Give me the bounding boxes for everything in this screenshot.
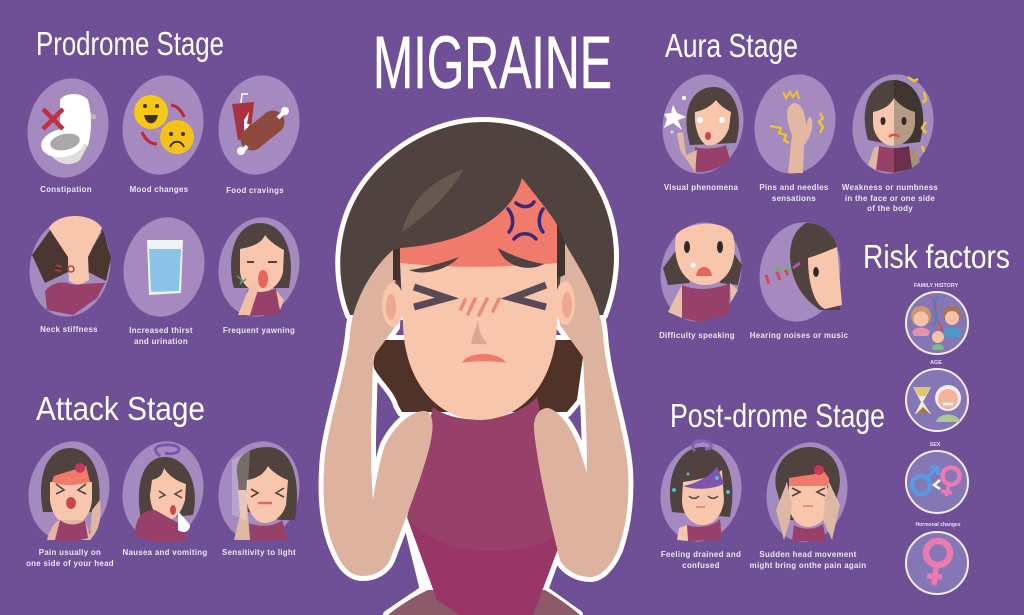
panel: post-drome stage [651, 397, 885, 570]
symptom: pins and needles [745, 67, 845, 203]
nose [471, 321, 487, 344]
symptom: neck stiffness [20, 210, 120, 334]
symptom: difficulty speaking: Difficulty speaking [659, 331, 735, 340]
blush [461, 299, 499, 315]
panel: aura stage [651, 27, 943, 340]
white sticker outline [323, 122, 628, 615]
symptom: hearing noises or music [750, 215, 850, 340]
symptom: weakness or numbness: in the face or one side [845, 194, 935, 203]
right arm [534, 243, 628, 577]
symptom: difficulty speaking [651, 215, 751, 340]
title: MIGRAINE [373, 21, 612, 104]
symptom: sudden head movement: Sudden head movement [759, 550, 857, 559]
red forehead [400, 178, 557, 267]
symptom: food cravings: Food cravings [226, 186, 284, 195]
symptom: constipation: Constipation [40, 185, 92, 194]
symptom: visual phenomena [653, 67, 753, 192]
lower hair [373, 340, 583, 412]
symptom: pins and needles: sensations [772, 194, 816, 203]
symptom: frequent yawning: Frequent yawning [223, 326, 295, 335]
face [400, 262, 557, 420]
symptom: frequent yawning [209, 210, 309, 335]
anger mark [508, 202, 543, 239]
heading: aura stage: Aura Stage [665, 27, 798, 64]
risk: age [906, 360, 968, 431]
symptom: sudden head movement [750, 435, 866, 570]
symptom: weakness or numbness [842, 67, 943, 213]
symptom: pins and needles: Pins and needles [759, 183, 829, 192]
ears [382, 283, 404, 327]
symptom: feeling drained and confused [651, 435, 751, 570]
risk: sex [906, 442, 968, 513]
left arm [323, 250, 433, 576]
closed eyes [414, 287, 447, 307]
symptom: feeling drained and confused: Feeling drained and [661, 550, 741, 559]
risk: age: AGE [930, 360, 942, 366]
hair [340, 122, 614, 315]
eyebrows [409, 257, 459, 272]
side bangs [393, 248, 400, 280]
symptom: mood changes [113, 68, 213, 194]
risk: hormonal changes: Hormonal changes [915, 522, 961, 528]
symptom: hearing noises or music: Hearing noises or music [750, 331, 849, 340]
risk: family history: FAMILY HISTORY [914, 283, 959, 289]
symptom: pain on one side: one side of your head [26, 559, 114, 568]
symptom: neck stiffness: Neck stiffness [40, 325, 98, 334]
heading: attack stage: Attack Stage [36, 390, 205, 427]
risk: hormonal changes [906, 522, 968, 594]
symptom: mood changes: Mood changes [130, 185, 189, 194]
panel: prodrome stage [18, 25, 309, 346]
main illustration: woman with migraine [323, 122, 628, 615]
symptom: feeling drained and confused: confused [682, 561, 720, 570]
symptom: pain on one side: Pain usually on [39, 548, 101, 557]
symptom: sensitivity to light [209, 434, 309, 557]
symptom: sudden head movement: might bring onthe pain again [750, 561, 866, 570]
symptom: pain on one side [19, 434, 119, 568]
symptom: increased thirst and urination [114, 210, 214, 346]
symptom: constipation [18, 71, 118, 194]
heading: prodrome stage: Prodrome Stage [36, 25, 224, 62]
dress [407, 397, 565, 615]
risk: family history [906, 283, 968, 354]
symptom: visual phenomena: Visual phenomena [664, 183, 738, 192]
symptom: increased thirst and urination: Increased thirst [129, 326, 193, 335]
skirt [388, 590, 580, 615]
symptom: weakness or numbness: of the body [867, 204, 913, 213]
symptom: nausea and vomiting: Nausea and vomiting [122, 548, 208, 557]
symptom: increased thirst and urination: and urination [134, 337, 188, 346]
mouth [463, 354, 505, 362]
panel: risk factors [863, 238, 1010, 594]
heading: post-drome stage: Post-drome Stage [670, 397, 885, 434]
symptom: food cravings [209, 68, 309, 195]
symptom: nausea and vomiting [113, 434, 213, 557]
risk: sex: SEX [930, 442, 941, 448]
panel: attack stage [19, 390, 309, 568]
symptom: sensitivity to light: Sensitivity to light [222, 548, 296, 557]
hair highlight [402, 169, 464, 232]
symptom: weakness or numbness: Weakness or numbness [842, 183, 938, 192]
